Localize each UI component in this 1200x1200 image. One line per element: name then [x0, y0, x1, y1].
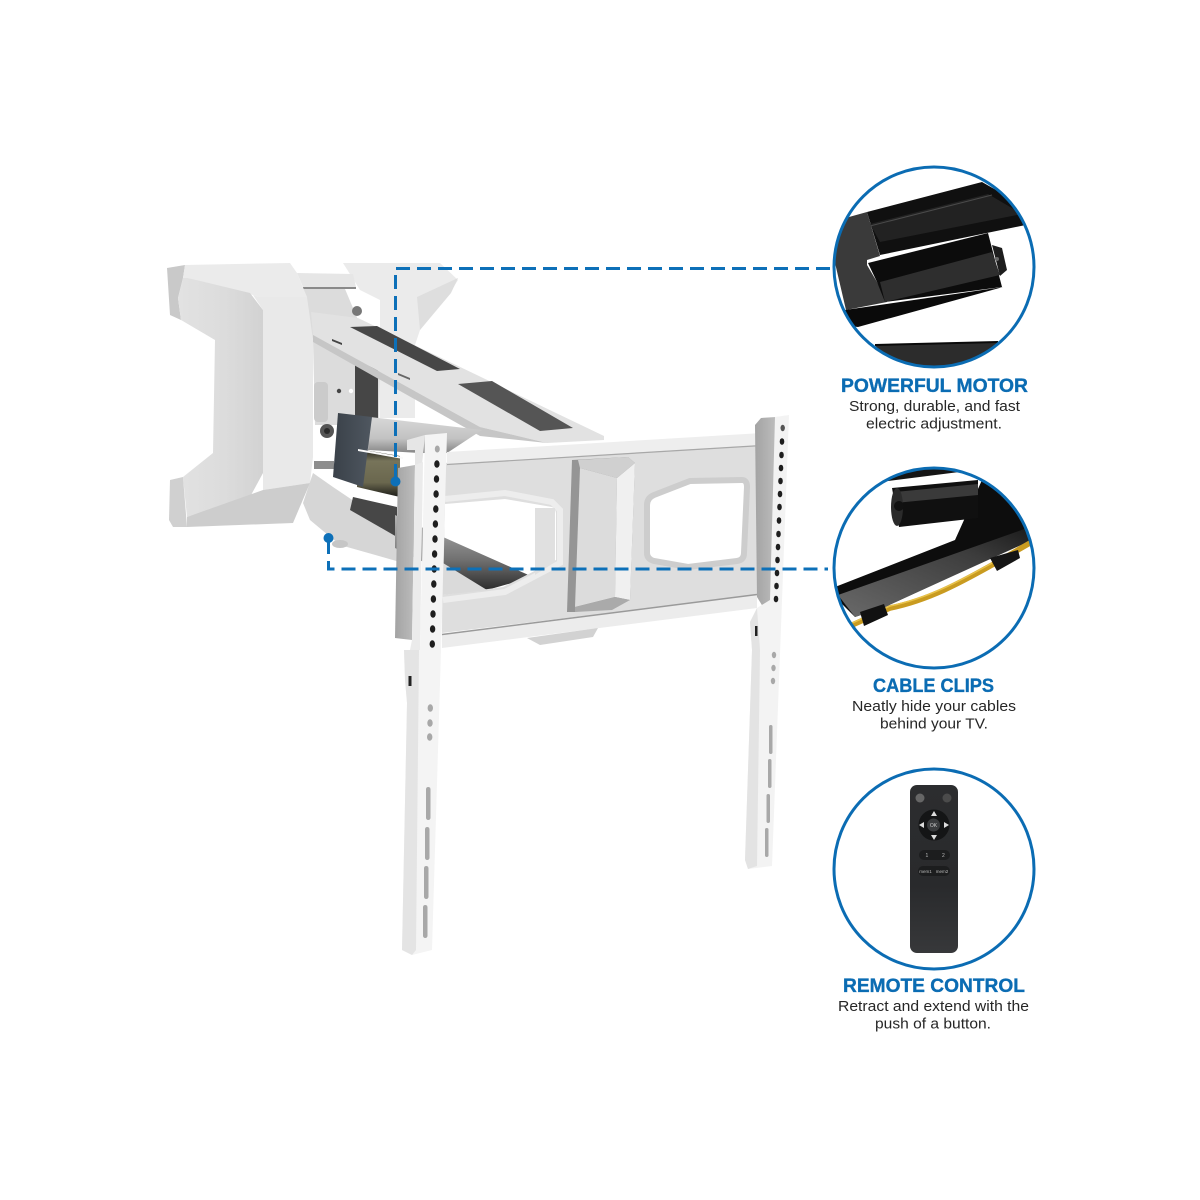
icon: remote control: OK [930, 823, 938, 829]
description: Retract and extend with the [838, 999, 1029, 1015]
left vertical TV rail [395, 433, 447, 955]
icon: remote control: mem2 [936, 869, 949, 874]
top rail bar [447, 433, 762, 464]
right vertical TV rail [745, 415, 789, 869]
left frame opening rim [443, 493, 560, 600]
circle photo: motor detail [823, 167, 1040, 368]
circle outline [834, 769, 1034, 969]
description: push of a button. [875, 1016, 991, 1032]
description: Neatly hide your cables [852, 699, 1016, 715]
lower extension bracket [303, 424, 400, 562]
left wall plate [167, 263, 313, 527]
hinge tab under frame [527, 628, 598, 645]
right rail upper holes [774, 425, 785, 602]
panel: cable clips [834, 462, 1034, 732]
left rail upper holes [430, 446, 440, 648]
dashed callout line: motor [390, 268, 830, 486]
upper extension arm [311, 312, 604, 443]
panel: remote control [834, 769, 1034, 1032]
circle photo: cable clips detail [834, 462, 1034, 668]
right frame opening rim [647, 480, 747, 567]
panel: powerful motor [823, 167, 1040, 432]
right rail lower holes and slots [755, 626, 776, 857]
bottom rail bar [442, 595, 757, 648]
icon: remote control [910, 785, 958, 953]
center block [567, 457, 635, 612]
icon: remote control: 2 [942, 853, 945, 859]
linear motor actuator [333, 413, 482, 497]
heading: REMOTE CONTROL [843, 975, 1025, 997]
lower arm seen through frame [395, 515, 533, 590]
description: electric adjustment. [866, 416, 1002, 432]
heading: CABLE CLIPS [873, 675, 994, 697]
description: behind your TV. [880, 716, 988, 732]
left rail lower holes and slots [408, 676, 433, 938]
icon: remote control: mem1 [919, 869, 932, 874]
icon: remote control: 1 [926, 853, 928, 859]
dashed callout line: cable clips [324, 533, 828, 569]
heading: POWERFUL MOTOR [841, 375, 1028, 397]
front carriage frame [442, 433, 762, 648]
motorized wall mount product [167, 263, 789, 955]
rear wall plate [297, 263, 458, 425]
description: Strong, durable, and fast [849, 399, 1020, 415]
